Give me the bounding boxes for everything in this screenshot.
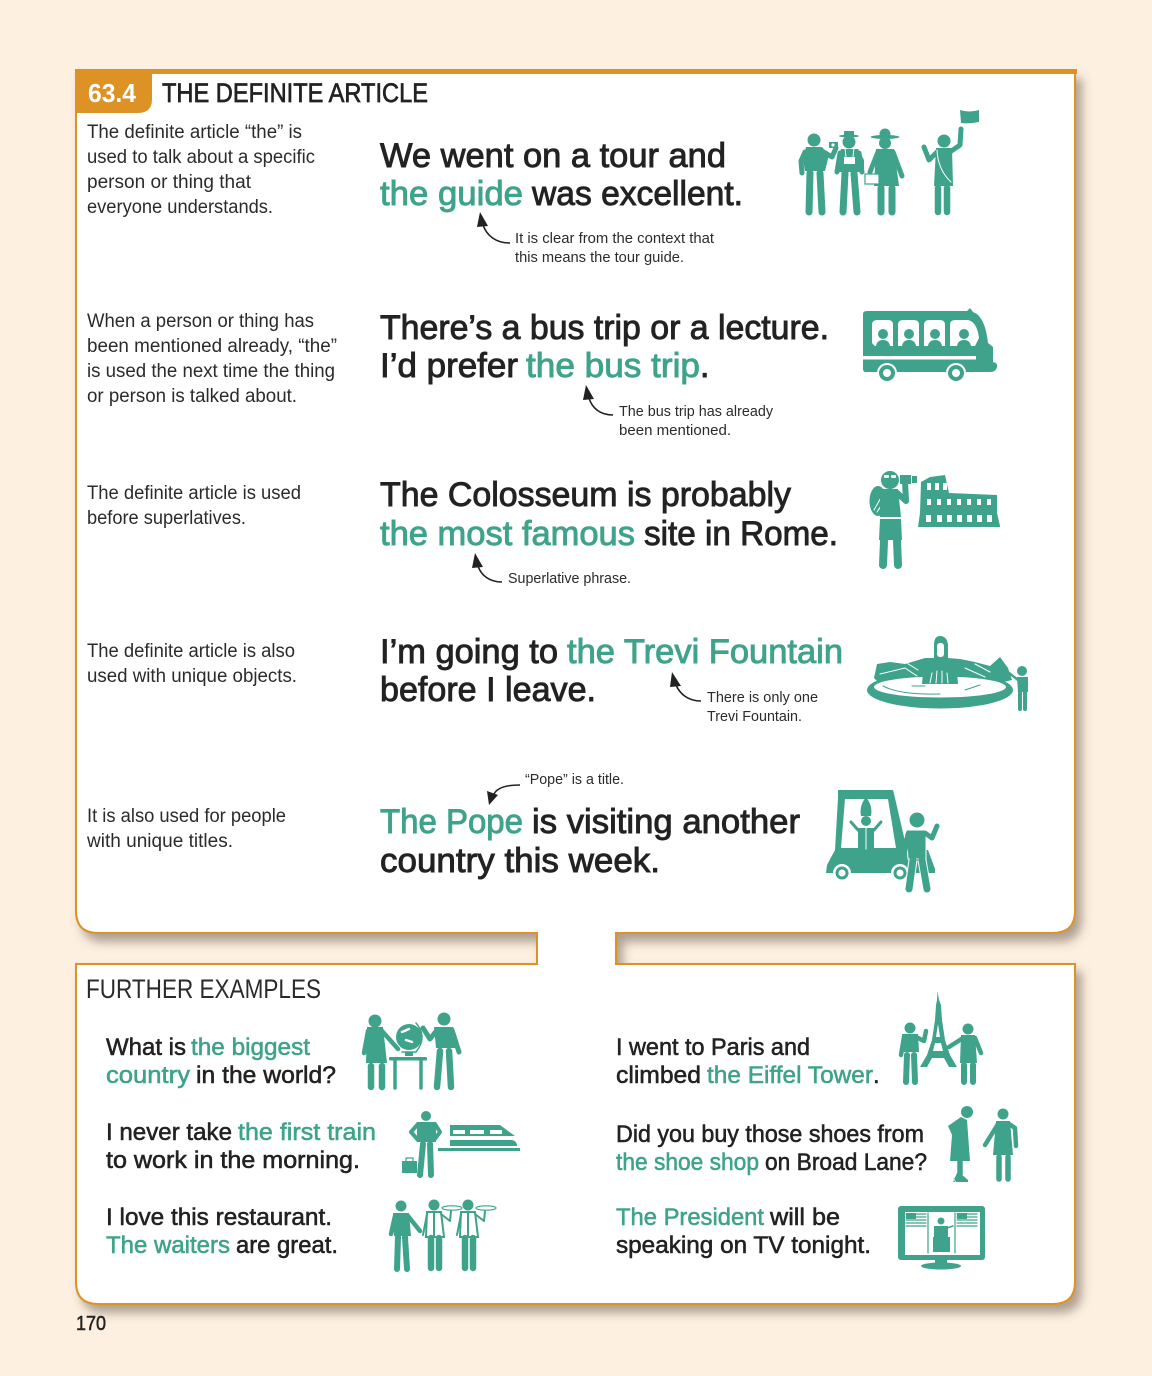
- icon: three waiters: [391, 1200, 496, 1269]
- note: The bus trip has already: [619, 404, 774, 420]
- arrow: [670, 672, 701, 701]
- sentence: the shoe shop: [616, 1149, 759, 1176]
- sentence: [106, 1034, 336, 1089]
- note: “Pope” is a title.: [525, 772, 624, 788]
- example sentence: country this week.: [380, 842, 660, 880]
- sentence: speaking on TV tonight.: [616, 1232, 871, 1259]
- note: [707, 690, 818, 725]
- example sentence: The Pope: [380, 803, 523, 841]
- example: biggest country: [106, 1012, 459, 1089]
- sentence: to work in the morning.: [106, 1147, 360, 1174]
- row 2: the bus trip: [87, 308, 997, 439]
- arrow: [583, 385, 613, 415]
- example sentence: [380, 633, 843, 709]
- sentence: climbed: [616, 1062, 701, 1089]
- explanation text: person or thing that: [87, 172, 252, 193]
- sentence: What is: [106, 1034, 186, 1061]
- panel: main card and further examples outline: [76, 71, 1075, 1304]
- sentence: [106, 1119, 376, 1174]
- explanation text: [86, 806, 286, 852]
- explanation text: [87, 641, 297, 687]
- row 4: unique objects: [87, 633, 1028, 725]
- example sentence: the guide: [380, 175, 523, 213]
- explanation text: The definite article is also: [87, 641, 295, 662]
- explanation text: The definite article is used: [87, 483, 301, 504]
- icon: couple at Eiffel Tower: [901, 991, 981, 1082]
- sentence: [106, 1204, 338, 1259]
- sentence: [616, 1204, 871, 1259]
- explanation text: used to talk about a specific: [87, 147, 315, 168]
- icon: bus: [863, 308, 997, 383]
- page number: 170: [76, 1313, 106, 1335]
- explanation text: It is also used for people: [87, 806, 286, 827]
- icon: popemobile with bystander: [826, 790, 937, 889]
- note: There is only one: [707, 690, 818, 706]
- sentence: country: [106, 1062, 190, 1089]
- explanation text: [87, 483, 301, 529]
- arrow: [477, 212, 510, 243]
- example: shoe shop: [616, 1106, 1016, 1182]
- sentence: The President: [616, 1204, 764, 1231]
- row 5: unique titles: [86, 772, 937, 889]
- explanation text: [87, 311, 337, 407]
- sentence: in the world?: [196, 1062, 336, 1089]
- heading: further examples: FURTHER EXAMPLES: [86, 974, 321, 1004]
- sentence: .: [873, 1062, 880, 1089]
- sentence: Did you buy those shoes from: [616, 1121, 924, 1148]
- icon: tourists and guide: [801, 110, 979, 212]
- explanation text: before superlatives.: [87, 508, 246, 529]
- note: It is clear from the context that: [515, 231, 714, 247]
- sentence: [616, 1034, 880, 1089]
- section header: 63.4: [88, 78, 137, 108]
- example: waiters: [106, 1200, 496, 1269]
- icon: man waiting for train: [402, 1111, 520, 1175]
- explanation text: [87, 122, 315, 218]
- explanation text: The definite article “the” is: [87, 122, 302, 143]
- explanation text: with unique titles.: [86, 831, 233, 852]
- icon: people with globe: [364, 1012, 459, 1088]
- note: been mentioned.: [619, 423, 731, 439]
- example: Eiffel Tower: [616, 991, 981, 1089]
- sentence: I never take: [106, 1119, 232, 1146]
- sentence: on Broad Lane?: [765, 1149, 927, 1176]
- arrow: [487, 785, 520, 805]
- icon: two women talking about shoes: [948, 1106, 1016, 1182]
- example sentence: [380, 803, 800, 880]
- example: first train: [106, 1111, 520, 1175]
- note: Trevi Fountain.: [707, 709, 802, 725]
- explanation text: or person is talked about.: [87, 386, 297, 407]
- example sentence: There’s a bus trip or a lecture.: [380, 309, 829, 347]
- example sentence: [380, 476, 838, 553]
- example: President on TV: [616, 1204, 985, 1270]
- sentence: the Eiffel Tower: [707, 1062, 873, 1089]
- example sentence: the most famous: [380, 515, 635, 553]
- arrow: [472, 553, 502, 582]
- example sentence: I’d prefer: [380, 347, 518, 385]
- example sentence: was excellent.: [531, 175, 743, 213]
- example sentence: site in Rome.: [644, 515, 838, 553]
- sentence: the first train: [238, 1119, 376, 1146]
- icon: TV with president: [898, 1206, 985, 1270]
- explanation text: When a person or thing has: [87, 311, 314, 332]
- section header: THE DEFINITE ARTICLE: [162, 78, 428, 108]
- example sentence: the bus trip: [526, 347, 700, 385]
- example sentence: the Trevi Fountain: [567, 633, 843, 671]
- example sentence: The Colosseum is probably: [380, 476, 791, 514]
- sentence: I love this restaurant.: [106, 1204, 332, 1231]
- icon: photographer and Colosseum: [870, 471, 1000, 565]
- sentence: will be: [769, 1204, 840, 1231]
- sentence: I went to Paris and: [616, 1034, 810, 1061]
- explanation text: used with unique objects.: [87, 666, 297, 687]
- note: this means the tour guide.: [515, 250, 684, 266]
- sentence: are great.: [236, 1232, 338, 1259]
- example sentence: .: [700, 347, 709, 385]
- sentence: [616, 1121, 927, 1176]
- explanation text: everyone understands.: [87, 197, 273, 218]
- sentence: The waiters: [106, 1232, 230, 1259]
- example sentence: I’m going to: [380, 633, 558, 671]
- explanation text: been mentioned already, “the”: [87, 336, 337, 357]
- explanation text: is used the next time the thing: [87, 361, 335, 382]
- section header: [75, 69, 1077, 113]
- icon: Trevi Fountain with visitor: [867, 636, 1028, 709]
- row 3: superlatives: [87, 471, 1000, 587]
- example sentence: [380, 137, 743, 213]
- example sentence: [380, 309, 829, 385]
- note: [515, 231, 714, 266]
- note: Superlative phrase.: [508, 571, 631, 587]
- row 1: the guide: [87, 110, 979, 266]
- example sentence: before I leave.: [380, 671, 596, 709]
- example sentence: is visiting another: [532, 803, 800, 841]
- note: [619, 404, 774, 439]
- sentence: the biggest: [191, 1034, 310, 1061]
- example sentence: We went on a tour and: [380, 137, 726, 175]
